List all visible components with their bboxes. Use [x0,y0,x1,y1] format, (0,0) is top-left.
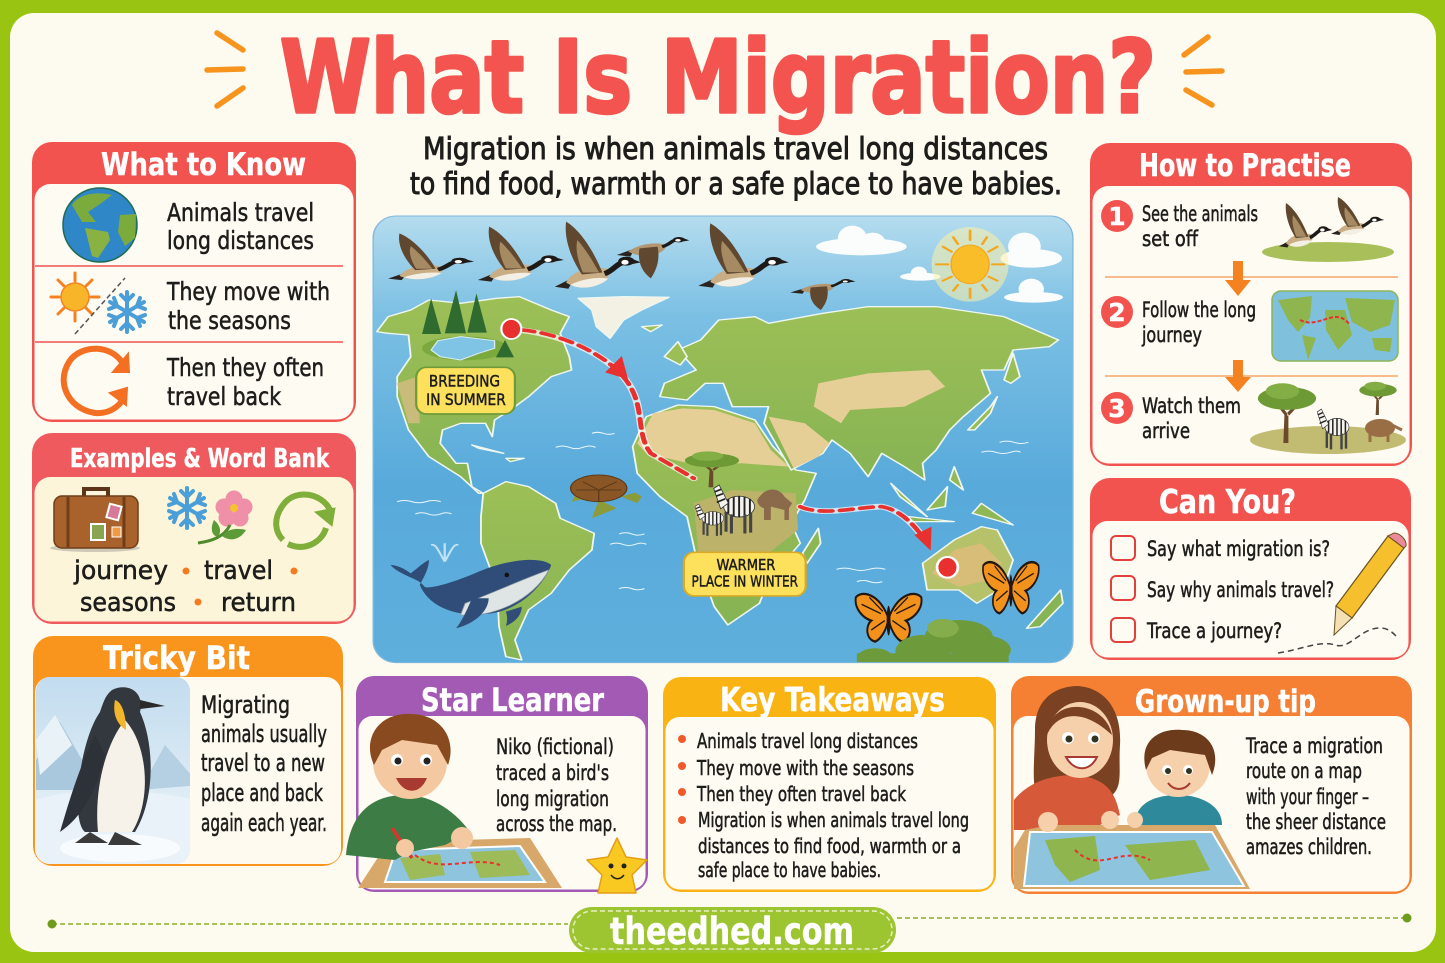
step text: Watch them [1142,394,1241,418]
checkboxes [1111,536,1135,642]
word bank: seasons [80,588,176,618]
text block: animals usually [201,720,327,748]
text block: travel to a new [201,749,325,777]
icon: sun and snowflake [51,273,145,334]
continents [377,297,1063,660]
arrows between steps [1225,261,1251,392]
word bank: journey [73,556,168,586]
text block [496,735,617,836]
step text: journey [1141,323,1202,347]
text block: long distances [167,226,314,255]
step text [1141,202,1258,443]
image: geese setting off [1262,197,1394,262]
text block: Trace a migration [1245,734,1383,758]
heading: tricky bit: Tricky Bit [103,639,250,677]
icon: return arrows [64,349,129,413]
step numbers [1101,200,1133,424]
turtle [571,475,642,518]
takeaways text: Then they often travel back [696,782,906,806]
illustration: boy tracing map [346,714,562,888]
panel: how to practise [1090,143,1412,466]
text block: They move with [166,277,330,306]
text block: travel back [167,382,281,411]
footer dashed lines [48,914,1412,928]
waves [397,432,1029,590]
word bank [73,556,298,618]
panel: star learner [346,676,648,893]
label: breeding in summer [416,367,515,414]
checklist text: Say what migration is? [1147,537,1330,561]
text block: again each year. [201,809,327,837]
takeaways text: Migration is when animals travel long [698,808,969,832]
icon: snowflake and flower [169,488,252,543]
text block: Niko (fictional) [496,735,614,759]
illustration: penguin on ice [36,677,200,864]
panel: key takeaways [663,677,996,892]
step numbers: 3 [1108,394,1126,423]
whale [390,543,551,628]
takeaways text: They move with the seasons [696,756,914,780]
text block: route on a map [1246,759,1362,783]
title: What Is Migration? [280,19,1156,136]
label: warmer place in winter: PLACE IN WINTER [692,573,798,591]
illustration: parent and child with map [1014,686,1250,889]
heading: grown-up tip: Grown-up tip [1135,684,1316,720]
text block: amazes children. [1246,835,1372,859]
bullets [678,735,686,824]
icon: pencil [1334,533,1406,635]
step text: See the animals [1142,202,1258,226]
text block: long migration [496,787,609,811]
word bank: return [221,588,296,618]
heading: how to practise: How to Practise [1139,148,1351,184]
text block [1245,734,1386,859]
route arrows [501,319,958,578]
squiggle [1278,628,1396,653]
word bank: travel [204,556,273,586]
panel: grown-up tip [1011,676,1412,894]
checklist text: Say why animals travel? [1147,578,1334,602]
text block [166,198,330,411]
icon: green cycle arrows [276,494,335,547]
step numbers: 2 [1108,298,1126,327]
heading: examples: Examples & Word Bank [70,444,330,474]
trees and lake [422,290,514,360]
panel: tricky bit [33,636,343,866]
label: warmer place in winter [684,552,806,596]
label: breeding in summer: IN SUMMER [426,391,506,409]
step text: Follow the long [1142,298,1256,322]
takeaways text: safe place to have babies. [698,858,881,882]
heading: can you: Can You? [1159,482,1296,521]
butterflies [856,562,1039,642]
text block: Then they often [166,353,324,382]
label: warmer place in winter: WARMER [716,557,776,574]
text block: Migrating [201,691,290,719]
subtitle: Migration is when animals travel long distances [423,132,1048,167]
decoration: rays left of title [207,33,243,106]
panel: what to know [32,142,356,422]
text block: the seasons [168,306,291,335]
text block: place and back [201,779,323,807]
decoration: rays right of title [1184,37,1222,105]
icon: suitcase [50,489,140,552]
icon: globe [63,188,137,262]
heading: star learner: Star Learner [421,681,604,719]
bush [856,619,1011,662]
label: breeding in summer: BREEDING [429,372,500,391]
step numbers: 1 [1108,202,1126,231]
takeaways text: Animals travel long distances [697,729,918,753]
geese [388,222,856,310]
subtitle: to find food, warmth or a safe place to have babies. [410,167,1062,202]
step text: set off [1142,227,1198,251]
image: mini map [1272,291,1398,361]
text block: the sheer distance [1246,810,1386,834]
heading: key takeaways: Key Takeaways [720,680,945,719]
text block [201,691,327,837]
icon: star [587,838,647,893]
deserts [397,370,1002,587]
heading: what to know: What to Know [101,147,306,183]
text block: across the map. [496,812,617,836]
takeaways text: distances to find food, warmth or a [698,834,961,858]
image: savanna [1250,382,1406,454]
zebras and savanna tree [685,451,798,553]
checklist text: Trace a journey? [1146,619,1282,643]
clouds and sun [816,226,1063,303]
text block: traced a bird's [496,761,609,785]
panel: can you [1090,478,1411,660]
panel: world map [373,216,1073,668]
text block: Animals travel [167,198,314,227]
footer badge: website: theedhed.com [610,910,854,953]
checklist text [1146,537,1334,643]
panel: examples and word bank [32,433,356,624]
subtitle [410,132,1062,202]
text block: with your finger – [1246,785,1369,809]
takeaways text [696,729,969,882]
step text: arrive [1142,419,1190,443]
